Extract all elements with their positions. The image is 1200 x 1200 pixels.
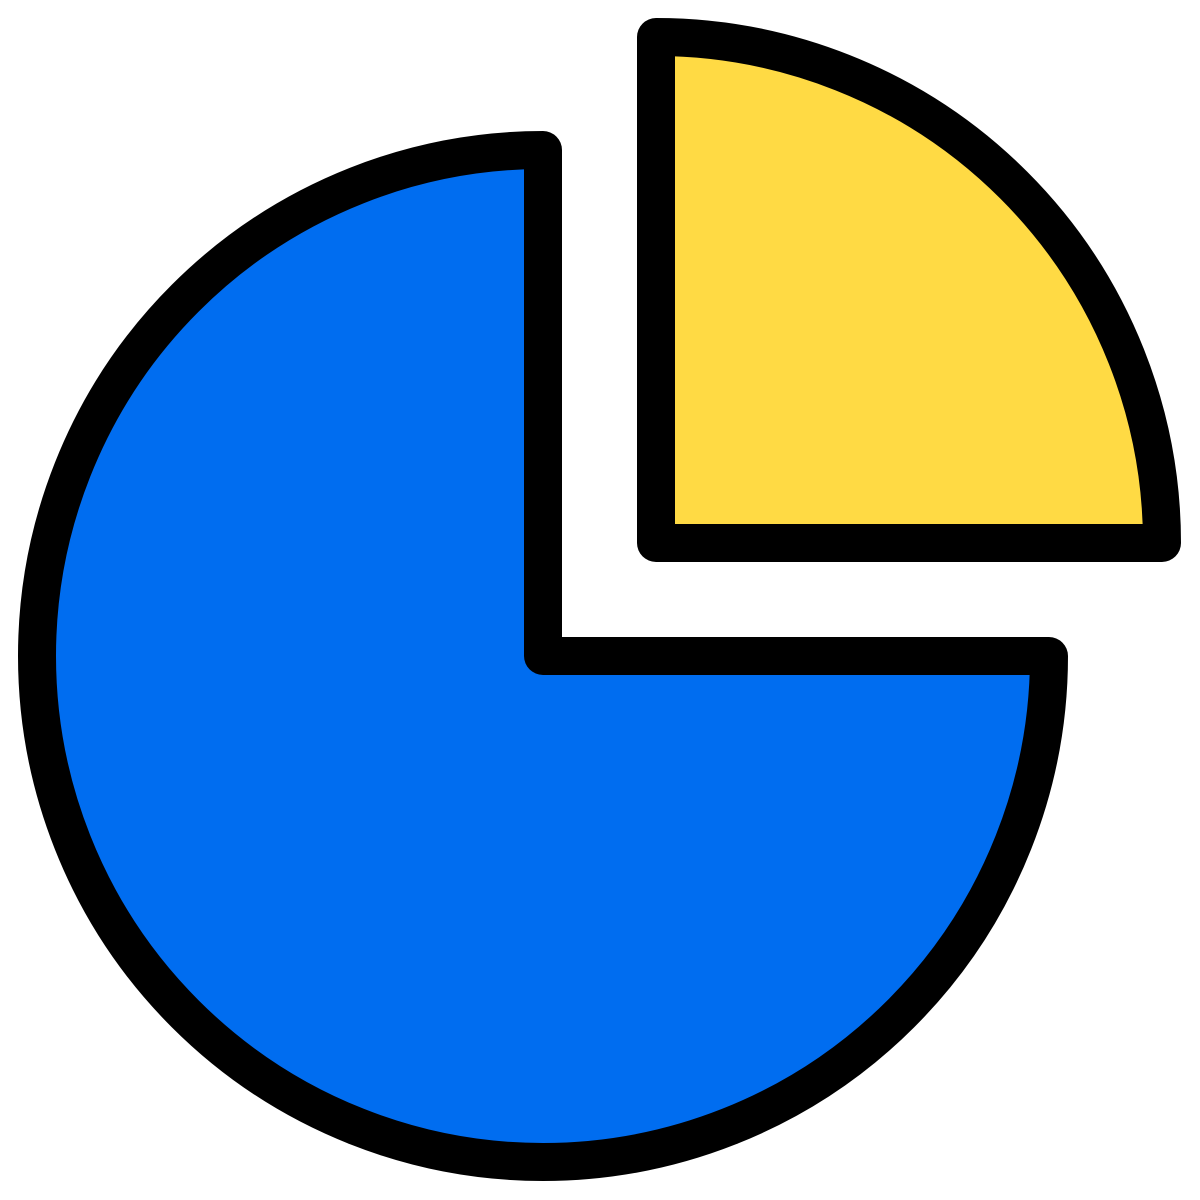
yellow quarter pie slice [656,37,1162,543]
blue three-quarter pie slice [37,150,1049,1162]
